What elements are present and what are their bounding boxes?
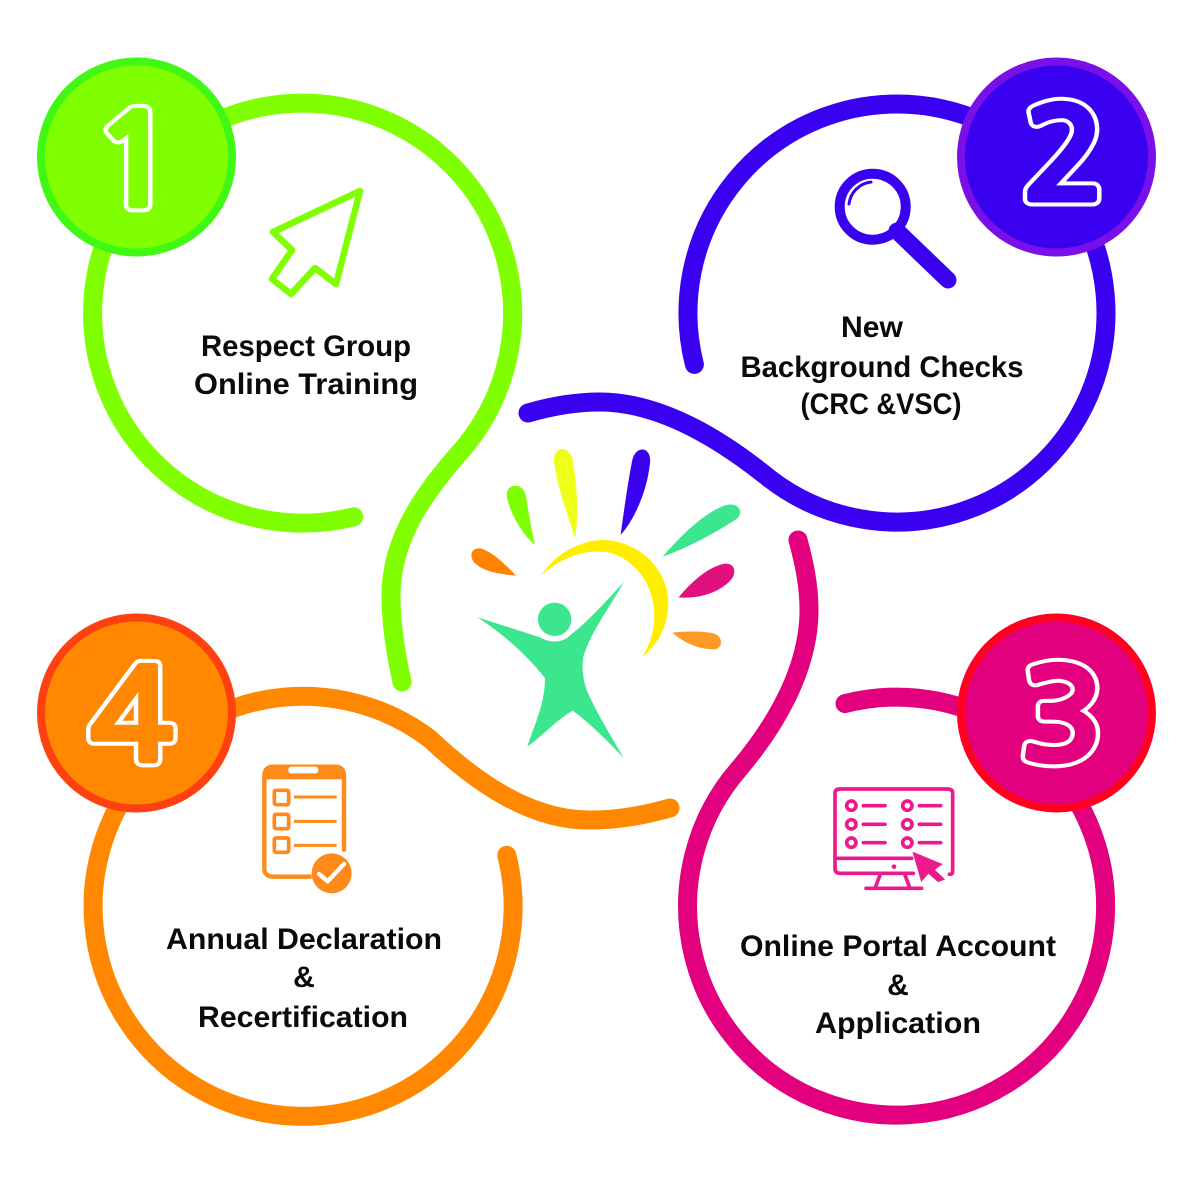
figure [478, 582, 624, 758]
panel: step 4 annual declaration [41, 618, 670, 1116]
icon: clipboard checklist [264, 766, 352, 893]
number badge 2: 2 [1021, 95, 1108, 220]
heading: online portal account application [740, 930, 1056, 1040]
icon: magnifier [840, 174, 948, 280]
icon: cursor arrow [272, 191, 360, 294]
number badge 4 [41, 618, 232, 808]
number badge 4: 4 [89, 656, 175, 781]
heading: new background checks [740, 311, 1024, 421]
number badge 3: 3 [1019, 656, 1105, 781]
heading: online portal account application: & [887, 969, 909, 1002]
sun rays [471, 449, 740, 649]
panel: step 2 background checks [528, 62, 1152, 522]
heading: annual declaration recertification: Recertification [198, 1001, 408, 1034]
number badge 2 [961, 62, 1152, 252]
sun arc [541, 540, 668, 657]
heading: online portal account application: Online Portal Account [740, 930, 1056, 963]
central logo: figure reaching for a sun [471, 449, 740, 758]
heading: annual declaration recertification: & [293, 961, 315, 994]
green ring [93, 103, 513, 682]
heading: respect group online training [194, 330, 418, 401]
heading: new background checks: New [841, 311, 904, 344]
number badge 1 [41, 62, 232, 252]
blue ring [528, 104, 1106, 522]
number badge 1: 1 [92, 101, 178, 226]
heading: online portal account application: Application [815, 1007, 981, 1040]
pink ring [688, 540, 1106, 1115]
heading: new background checks: (CRC &VSC) [800, 388, 962, 421]
number badge 3 [961, 618, 1152, 808]
number badge 2: 2 [1021, 95, 1108, 220]
heading: respect group online training: Online Training [194, 368, 418, 401]
icon: monitor with cursor [835, 789, 953, 888]
heading: new background checks: Background Checks [740, 351, 1024, 384]
orange ring [93, 696, 670, 1116]
panel: step 3 online portal account [688, 540, 1152, 1115]
panel: step 1 respect group online training [41, 62, 513, 682]
heading: respect group online training: Respect Group [201, 330, 411, 363]
number badge 3: 3 [1019, 656, 1105, 781]
heading: annual declaration recertification [166, 923, 442, 1034]
number badge 4: 4 [89, 656, 175, 781]
heading: annual declaration recertification: Annual Declaration [166, 923, 442, 956]
number badge 1: 1 [92, 101, 178, 226]
